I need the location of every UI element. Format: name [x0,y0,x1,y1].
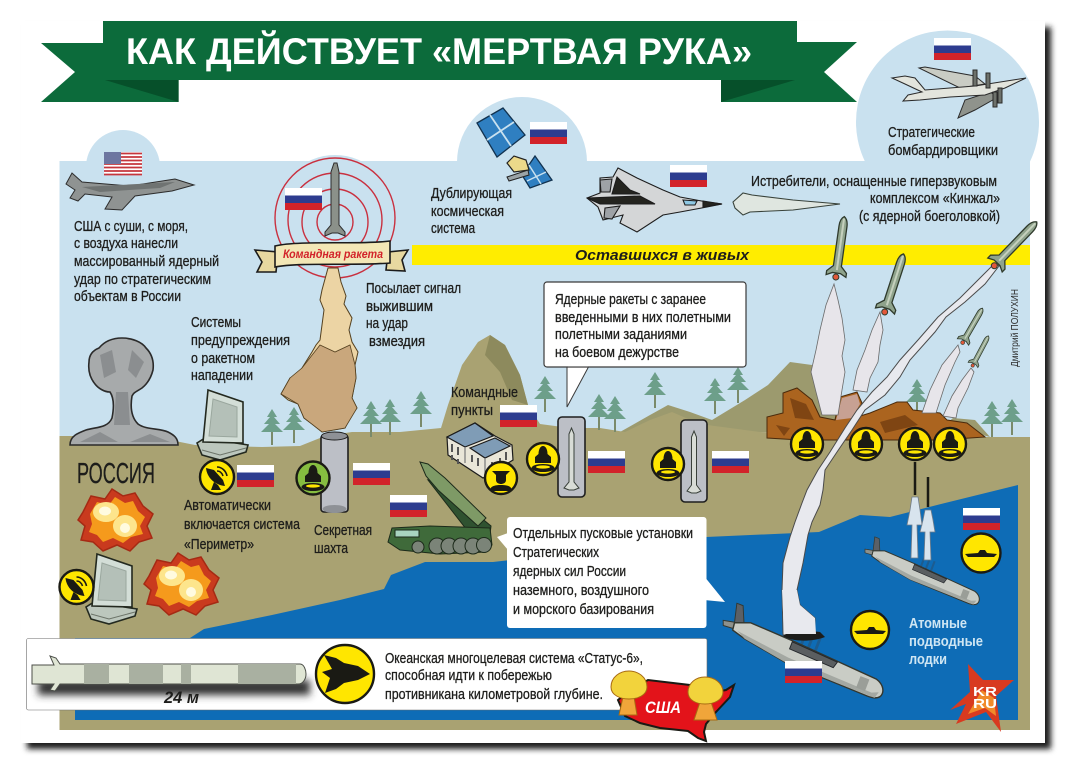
text: perimeter [184,497,301,553]
callout: launchers: Отдельных пусковые установки [513,525,693,542]
text: fighters: (с ядерной боеголовкой) [859,208,1000,225]
mushroom [611,671,647,715]
submarine [860,531,989,607]
text: Status-6 [385,650,643,703]
text: Status-6: Океанская многоцелевая система «Статус-6», [385,650,643,667]
callout: nuclear missiles: на боевом дежурстве [555,344,679,361]
icon: US bomber [66,173,194,210]
icons: silos row [791,428,966,460]
text: signal: на удар [366,315,408,332]
scorched earth [767,388,985,440]
plume base over sub [782,590,816,634]
text: fighters: Истребители, оснащенные гиперзвуковым [751,173,997,190]
torpedo [32,656,306,691]
text: US strike: массированный ядерный [74,253,219,270]
text: Status-6: способная идти к побережью [385,667,552,684]
mobile launcher [388,462,492,554]
text: perimeter: включается система [184,516,301,533]
title text: КАК ДЕЙСТВУЕТ «МЕРТВАЯ РУКА» [126,30,752,72]
icon: submarine [851,611,889,649]
mushroom cloud [70,338,178,445]
text: bombers: бомбардировщики [888,142,998,159]
rocket plume tan [281,268,358,432]
icon: US flag [104,152,142,175]
strategic bomber [892,67,1026,118]
text: warning systems: предупреждения [191,332,290,349]
scorched earth dark patches [776,398,918,436]
mushroom [688,677,723,720]
band text: Оставшихся в живых [575,247,750,264]
text: submarines: подводные [909,633,983,650]
text: signal: выжившим [366,298,433,315]
yellow band [412,245,1030,265]
text: warning systems [191,314,290,384]
panel: Status-6 [26,638,707,710]
text: satellite: система [431,220,476,237]
big missile plume [782,263,999,635]
credit: Дмитрий ПОЛУХИН [1009,289,1021,367]
icon: radar [200,460,234,494]
missile plume [853,312,883,392]
flag: fighter [670,165,707,187]
submarine [716,596,896,701]
text: US strike: с воздуха нанесли [74,235,178,252]
warning slab [197,390,248,460]
text: command posts: Командные [451,384,518,401]
flag: strategic bomber [934,38,971,60]
logo: KP star [950,664,1014,732]
callout: launchers: Стратегических [513,544,599,561]
callout: nuclear missiles: полетными заданиями [555,326,687,343]
text: signal: взмездия [369,333,425,350]
icon: green silo [296,462,330,494]
text: submarines: Атомные [909,615,967,632]
satellite [477,108,552,188]
fighter jet [587,168,722,232]
flag [390,495,427,517]
crater [836,394,860,420]
text: perimeter: Автоматически [184,497,271,514]
banner: command rocket [255,241,408,272]
text: command posts [451,384,518,419]
text: bombers [888,124,998,159]
text: US strike: удар по стратегическим [74,271,211,288]
flag: command rocket [285,188,322,210]
command missile [325,163,345,236]
flag: satellite [530,122,567,144]
icon: radar [60,570,94,604]
callout: launchers: и морского базирования [513,601,654,618]
flag [237,465,274,487]
USA map [611,671,734,741]
logo: KP star: RU [973,696,997,711]
flag [353,463,390,485]
flag [963,508,1000,530]
text: Status-6: противникана километровой глубине. [385,686,603,703]
text: secret silo: шахта [314,540,349,557]
text: warning systems: нападении [191,367,253,384]
map label: США [645,698,681,717]
icon: silo [652,448,684,480]
title ribbon [41,21,857,102]
text: US strike: США с суши, с моря, [74,218,188,235]
callout: launchers [497,517,725,628]
text: signal: Посылает сигнал [366,280,461,297]
text: bombers: Стратегические [888,124,975,141]
missile [985,215,1044,275]
text: perimeter: «Периметр» [184,536,254,553]
text: warning systems: о ракетном [191,350,255,367]
missile [967,333,993,370]
icon: radar rings [275,158,395,278]
sea [75,485,1018,720]
missile plume [943,368,974,418]
ground [60,335,1030,730]
text: fighters [751,173,1000,225]
missile plume [922,345,960,413]
text: warning systems: Системы [191,314,241,331]
text: satellite: Дублирующая [431,185,512,202]
submarine plumes and missiles [907,462,935,560]
length label: 24 м [163,688,199,707]
banner text: Командная ракета [283,247,383,261]
text: secret silo: Секретная [314,522,372,539]
building [447,423,513,478]
text: command posts: пункты [451,402,493,419]
icon: officer [485,462,517,494]
flag [588,451,625,473]
missile [874,251,913,318]
mountain shading [485,335,528,405]
plume shading [281,345,357,432]
text: US strike: объектам в России [74,288,181,305]
explosion [144,553,219,615]
mountain backdrop hills [620,362,990,437]
callout: nuclear missiles [544,282,746,407]
icon: silo [527,443,559,475]
text: fighters: комплексом «Кинжал» [870,190,1000,207]
missile [956,305,988,348]
text: satellite: космическая [431,203,504,220]
icon: torpedo [316,645,374,703]
label: Russia: РОССИЯ [77,458,155,490]
text: satellite [431,185,512,237]
callout: nuclear missiles: введенными в них полетными [555,309,731,326]
icon: submarine [962,534,1000,572]
missile plume [811,284,845,415]
silo with missile [681,420,707,502]
text: submarines: лодки [909,651,947,668]
explosion [78,489,153,551]
sub launch base [783,631,825,641]
logo: KP star: KR [973,684,998,699]
warning slab [86,554,137,624]
text: submarines [909,615,983,668]
flag [500,405,537,427]
callout: launchers: ядерных сил России [513,563,626,580]
text: secret silo [314,522,372,557]
secret silo [321,432,348,513]
trees [261,367,1023,445]
callout: launchers: наземного, воздушного [513,582,649,599]
missile [826,215,854,281]
flag [712,451,749,473]
silo with missile [558,417,585,497]
text: signal [366,280,461,350]
callout: nuclear missiles: Ядерные ракеты с заранее [555,291,706,308]
flag [785,661,822,683]
text: US strike [74,218,219,305]
Kinzhal missile [733,193,840,215]
